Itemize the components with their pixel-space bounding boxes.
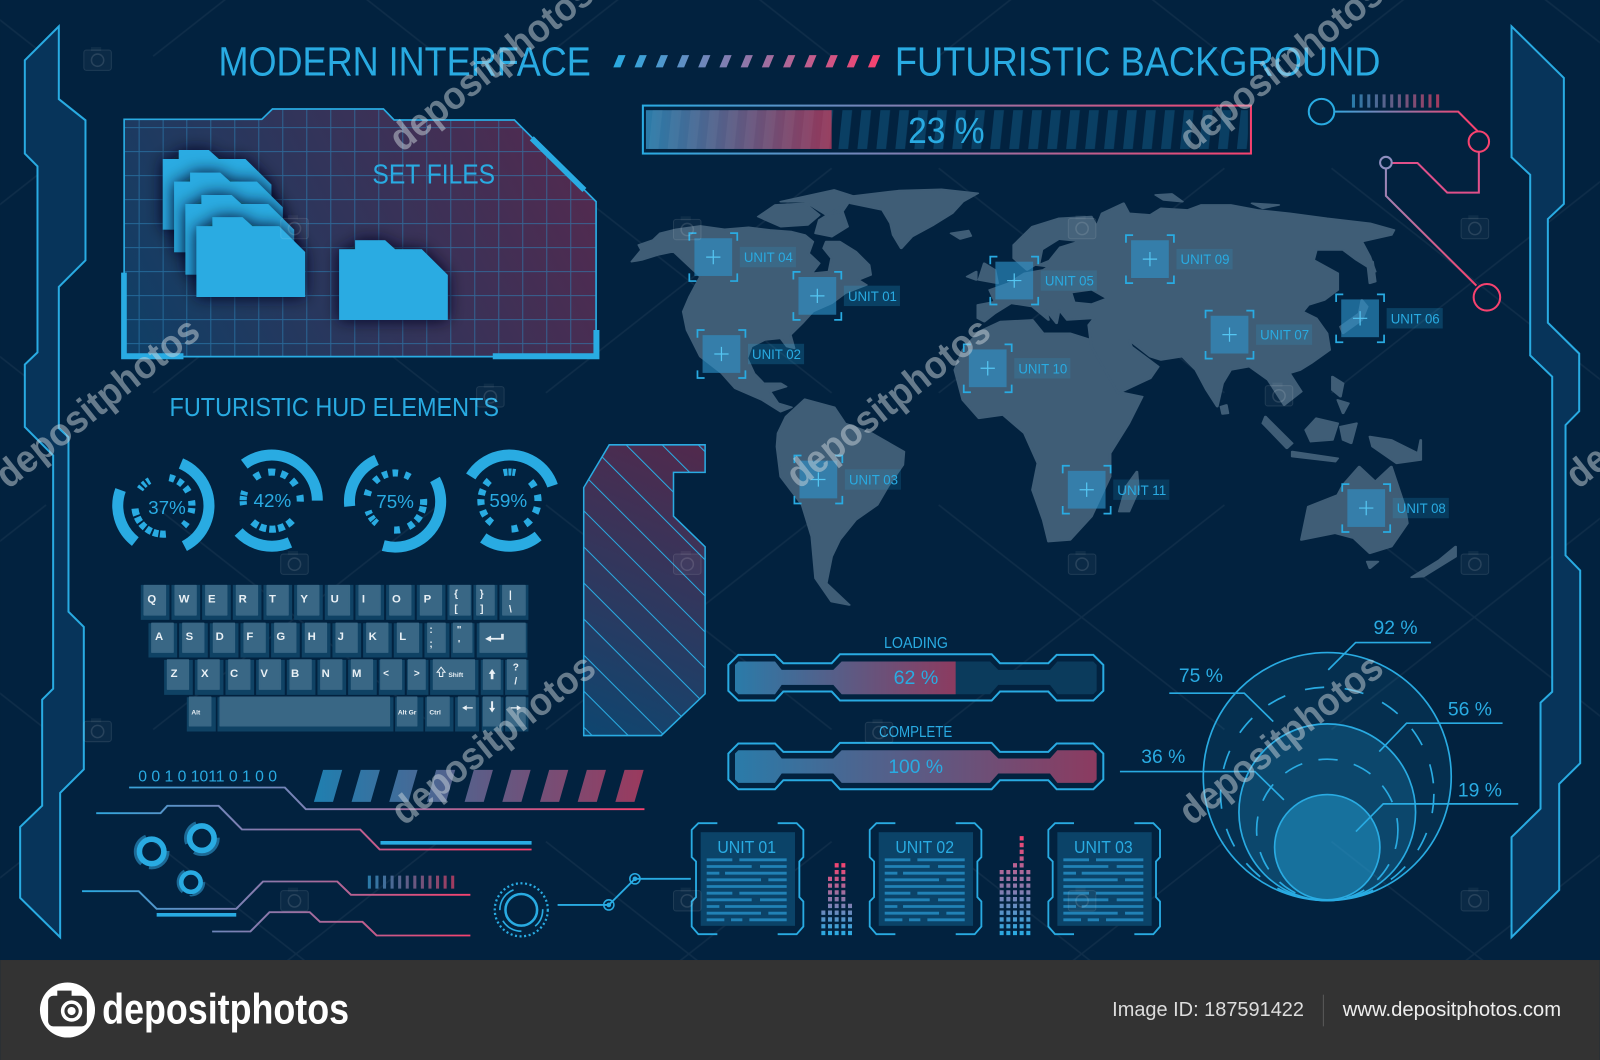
connector with nodes bbox=[558, 874, 691, 910]
map marker: unit 08 bbox=[1342, 484, 1449, 532]
keyboard: ' bbox=[458, 639, 460, 650]
keyboard: V bbox=[260, 668, 268, 680]
gauge 59% bbox=[445, 436, 574, 565]
title right: FUTURISTIC BACKGROUND bbox=[895, 38, 1381, 84]
gauge 42%: 42% bbox=[253, 490, 291, 511]
map marker: unit 05: UNIT 05 bbox=[1045, 274, 1094, 290]
map marker: unit 04: UNIT 04 bbox=[744, 250, 793, 266]
left side frame bbox=[20, 26, 85, 937]
keyboard: G bbox=[276, 631, 285, 643]
radar chart: 36 % bbox=[1141, 747, 1185, 768]
keyboard: Z bbox=[171, 668, 178, 680]
map marker: unit 01: UNIT 01 bbox=[848, 289, 897, 305]
keyboard: Shift bbox=[448, 672, 464, 679]
map marker: unit 01 bbox=[793, 272, 900, 320]
keyboard: X bbox=[201, 668, 209, 680]
keyboard: ; bbox=[429, 639, 433, 650]
watermark text: depositphotos bbox=[1171, 645, 1391, 833]
progress bar 23% bbox=[643, 106, 1251, 154]
unit card 02: UNIT 02 bbox=[895, 837, 954, 857]
keyboard: Alt bbox=[191, 710, 201, 717]
keyboard: O bbox=[392, 594, 401, 606]
loading bar 62%: 62 % bbox=[894, 668, 938, 689]
map marker: unit 03: UNIT 03 bbox=[849, 473, 898, 489]
equalizer left bbox=[823, 863, 850, 935]
keyboard: Ctrl bbox=[429, 710, 441, 717]
radar chart: 75 % bbox=[1179, 666, 1223, 687]
keyboard: ] bbox=[480, 604, 483, 615]
binary text: 0 0 1 0 1011 0 1 0 0 bbox=[138, 768, 277, 785]
keyboard: T bbox=[269, 594, 276, 606]
map marker: unit 11 bbox=[1063, 466, 1169, 514]
map marker: unit 09 bbox=[1126, 235, 1233, 283]
map marker: unit 02 bbox=[697, 330, 804, 378]
panel: set files bbox=[121, 107, 599, 359]
icon: single folder bbox=[339, 240, 448, 320]
title dashes bbox=[613, 55, 880, 67]
map marker: unit 08: UNIT 08 bbox=[1397, 501, 1446, 517]
footer logo text: depositphotos bbox=[102, 985, 349, 1033]
keyboard: S bbox=[186, 631, 194, 643]
title left: MODERN INTERFACE bbox=[218, 38, 591, 84]
keyboard: : bbox=[429, 625, 433, 636]
map marker: unit 06: UNIT 06 bbox=[1391, 311, 1440, 327]
keyboard: / bbox=[514, 677, 517, 688]
circuit lines and stripes bbox=[82, 770, 644, 936]
keyboard: N bbox=[322, 668, 330, 680]
map marker: unit 10: UNIT 10 bbox=[1018, 361, 1067, 377]
unit card 02 bbox=[870, 823, 981, 934]
map marker: unit 07: UNIT 07 bbox=[1260, 328, 1309, 344]
map marker: unit 09: UNIT 09 bbox=[1181, 252, 1230, 268]
keyboard: D bbox=[216, 631, 224, 643]
loading bar 62% bbox=[728, 635, 1103, 701]
map marker: unit 04 bbox=[689, 233, 796, 281]
watermark text bbox=[0, 0, 1600, 833]
map marker: unit 02: UNIT 02 bbox=[752, 347, 801, 363]
keyboard: H bbox=[308, 631, 316, 643]
icon: circular dial bbox=[495, 883, 548, 936]
gauge 75%: 75% bbox=[376, 491, 414, 512]
keyboard: Alt Gr bbox=[398, 710, 417, 717]
watermark cameras bbox=[84, 47, 1489, 911]
gauge 37% bbox=[99, 442, 227, 570]
keyboard: R bbox=[239, 594, 247, 606]
complete bar 100%: 100 % bbox=[888, 757, 943, 778]
heading: hud elements: FUTURISTIC HUD ELEMENTS bbox=[170, 392, 499, 422]
progress bar 23%: 23 % bbox=[908, 111, 985, 151]
watermark text: depositphotos bbox=[383, 645, 604, 833]
keyboard: I bbox=[362, 594, 365, 606]
map marker: unit 11: UNIT 11 bbox=[1117, 483, 1166, 499]
keyboard bbox=[141, 585, 528, 732]
unit card 03: UNIT 03 bbox=[1074, 837, 1133, 857]
footer url: www.depositphotos.com bbox=[1342, 999, 1561, 1021]
keyboard: K bbox=[369, 631, 378, 643]
gauge 37%: 37% bbox=[148, 497, 186, 518]
complete bar 100%: COMPLETE bbox=[879, 724, 952, 741]
keyboard: B bbox=[291, 668, 299, 680]
gauge 42% bbox=[208, 437, 336, 564]
unit card 01: UNIT 01 bbox=[717, 837, 776, 857]
map marker: unit 06 bbox=[1336, 294, 1443, 342]
keyboard: J bbox=[338, 631, 344, 643]
radar chart: 19 % bbox=[1458, 781, 1502, 802]
world map bbox=[632, 189, 1456, 605]
keyboard: U bbox=[331, 594, 339, 606]
keyboard: | bbox=[509, 590, 512, 601]
footer bar bbox=[0, 960, 1600, 1060]
unit card 03 bbox=[1048, 823, 1160, 934]
icon: cog rings bbox=[135, 822, 218, 895]
watermark text: depositphotos bbox=[778, 309, 999, 497]
radar chart: 92 % bbox=[1374, 618, 1418, 639]
unit card 01 bbox=[692, 823, 803, 934]
map marker: unit 03 bbox=[794, 456, 901, 503]
keyboard: C bbox=[230, 668, 238, 680]
keyboard: M bbox=[352, 668, 361, 680]
keyboard: " bbox=[457, 625, 462, 636]
footer image id: Image ID: 187591422 bbox=[1112, 999, 1304, 1021]
gauge 75% bbox=[333, 440, 457, 564]
striped shape bbox=[584, 445, 705, 736]
map marker: unit 05 bbox=[990, 257, 1097, 305]
keyboard: W bbox=[179, 594, 190, 606]
map marker: unit 07 bbox=[1206, 311, 1312, 359]
map marker: unit 10 bbox=[964, 344, 1070, 392]
complete bar 100% bbox=[728, 724, 1103, 789]
keyboard: E bbox=[208, 594, 216, 606]
keyboard: L bbox=[399, 631, 406, 643]
keyboard: [ bbox=[454, 604, 458, 615]
radar chart: 56 % bbox=[1448, 700, 1492, 721]
keyboard: { bbox=[454, 589, 458, 600]
keyboard: \ bbox=[509, 605, 512, 616]
keyboard: > bbox=[414, 669, 420, 680]
keyboard: F bbox=[246, 631, 253, 643]
footer logo icon bbox=[40, 982, 95, 1038]
loading bar 62%: LOADING bbox=[884, 635, 948, 652]
heading: set files: SET FILES bbox=[372, 158, 495, 189]
keyboard: ? bbox=[513, 663, 519, 674]
top right circuit bbox=[1309, 99, 1500, 311]
gauge 59%: 59% bbox=[489, 490, 527, 511]
keyboard: < bbox=[383, 669, 389, 680]
keyboard: P bbox=[424, 594, 432, 606]
equalizer right bbox=[1002, 836, 1028, 935]
right side frame bbox=[1512, 26, 1580, 937]
keyboard: Y bbox=[300, 594, 308, 606]
keyboard: A bbox=[155, 631, 163, 643]
keyboard: Q bbox=[147, 594, 156, 606]
radar chart bbox=[1120, 618, 1518, 901]
keyboard: } bbox=[480, 589, 484, 600]
icon: folder stack bbox=[163, 150, 305, 297]
